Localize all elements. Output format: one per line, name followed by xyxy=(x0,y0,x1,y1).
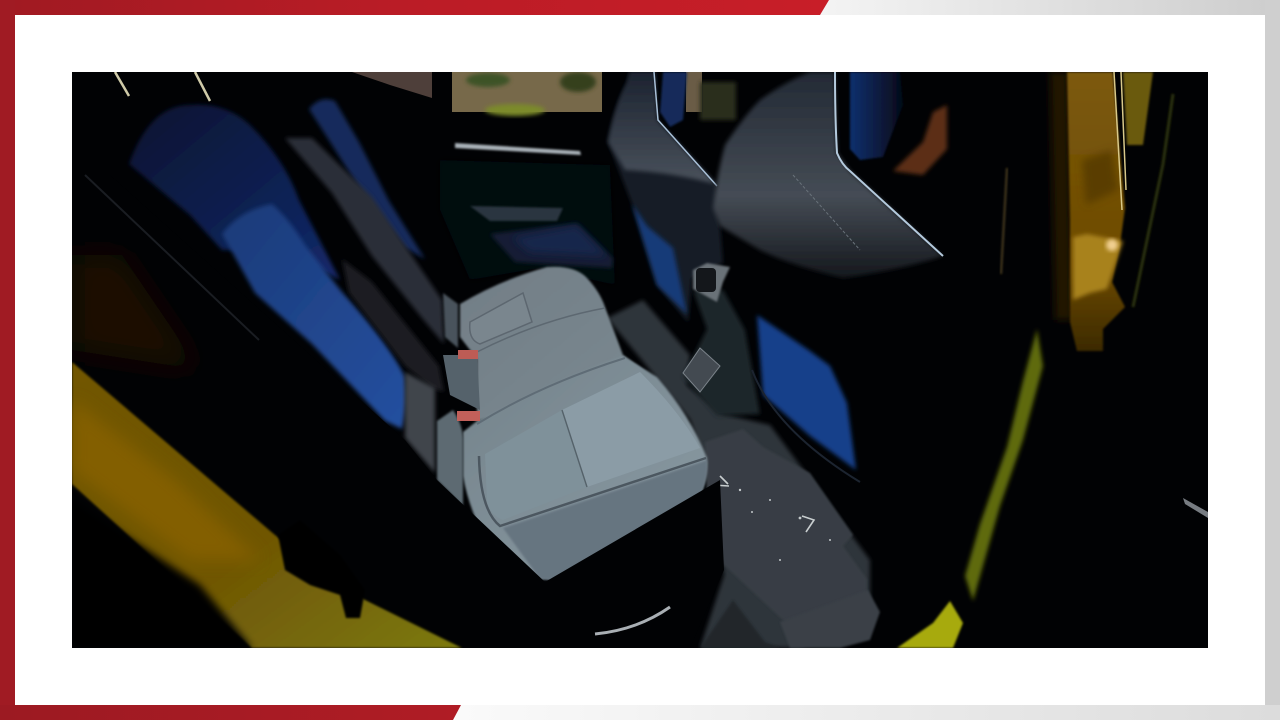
centre console xyxy=(683,263,760,416)
photo: car rear seats at night xyxy=(72,72,1208,648)
far door panel xyxy=(440,143,615,285)
rear seat backrest, near side (blue) xyxy=(129,99,444,473)
far front seat back xyxy=(608,72,723,322)
floor carpet xyxy=(607,300,880,648)
near door frame and yellow bodywork xyxy=(72,175,724,648)
rear seat cushions xyxy=(437,267,707,580)
outside view through door opening xyxy=(1050,72,1208,518)
right door sill in yellow xyxy=(897,168,1043,648)
near front seat back xyxy=(713,72,947,482)
window view with foliage xyxy=(115,72,736,120)
